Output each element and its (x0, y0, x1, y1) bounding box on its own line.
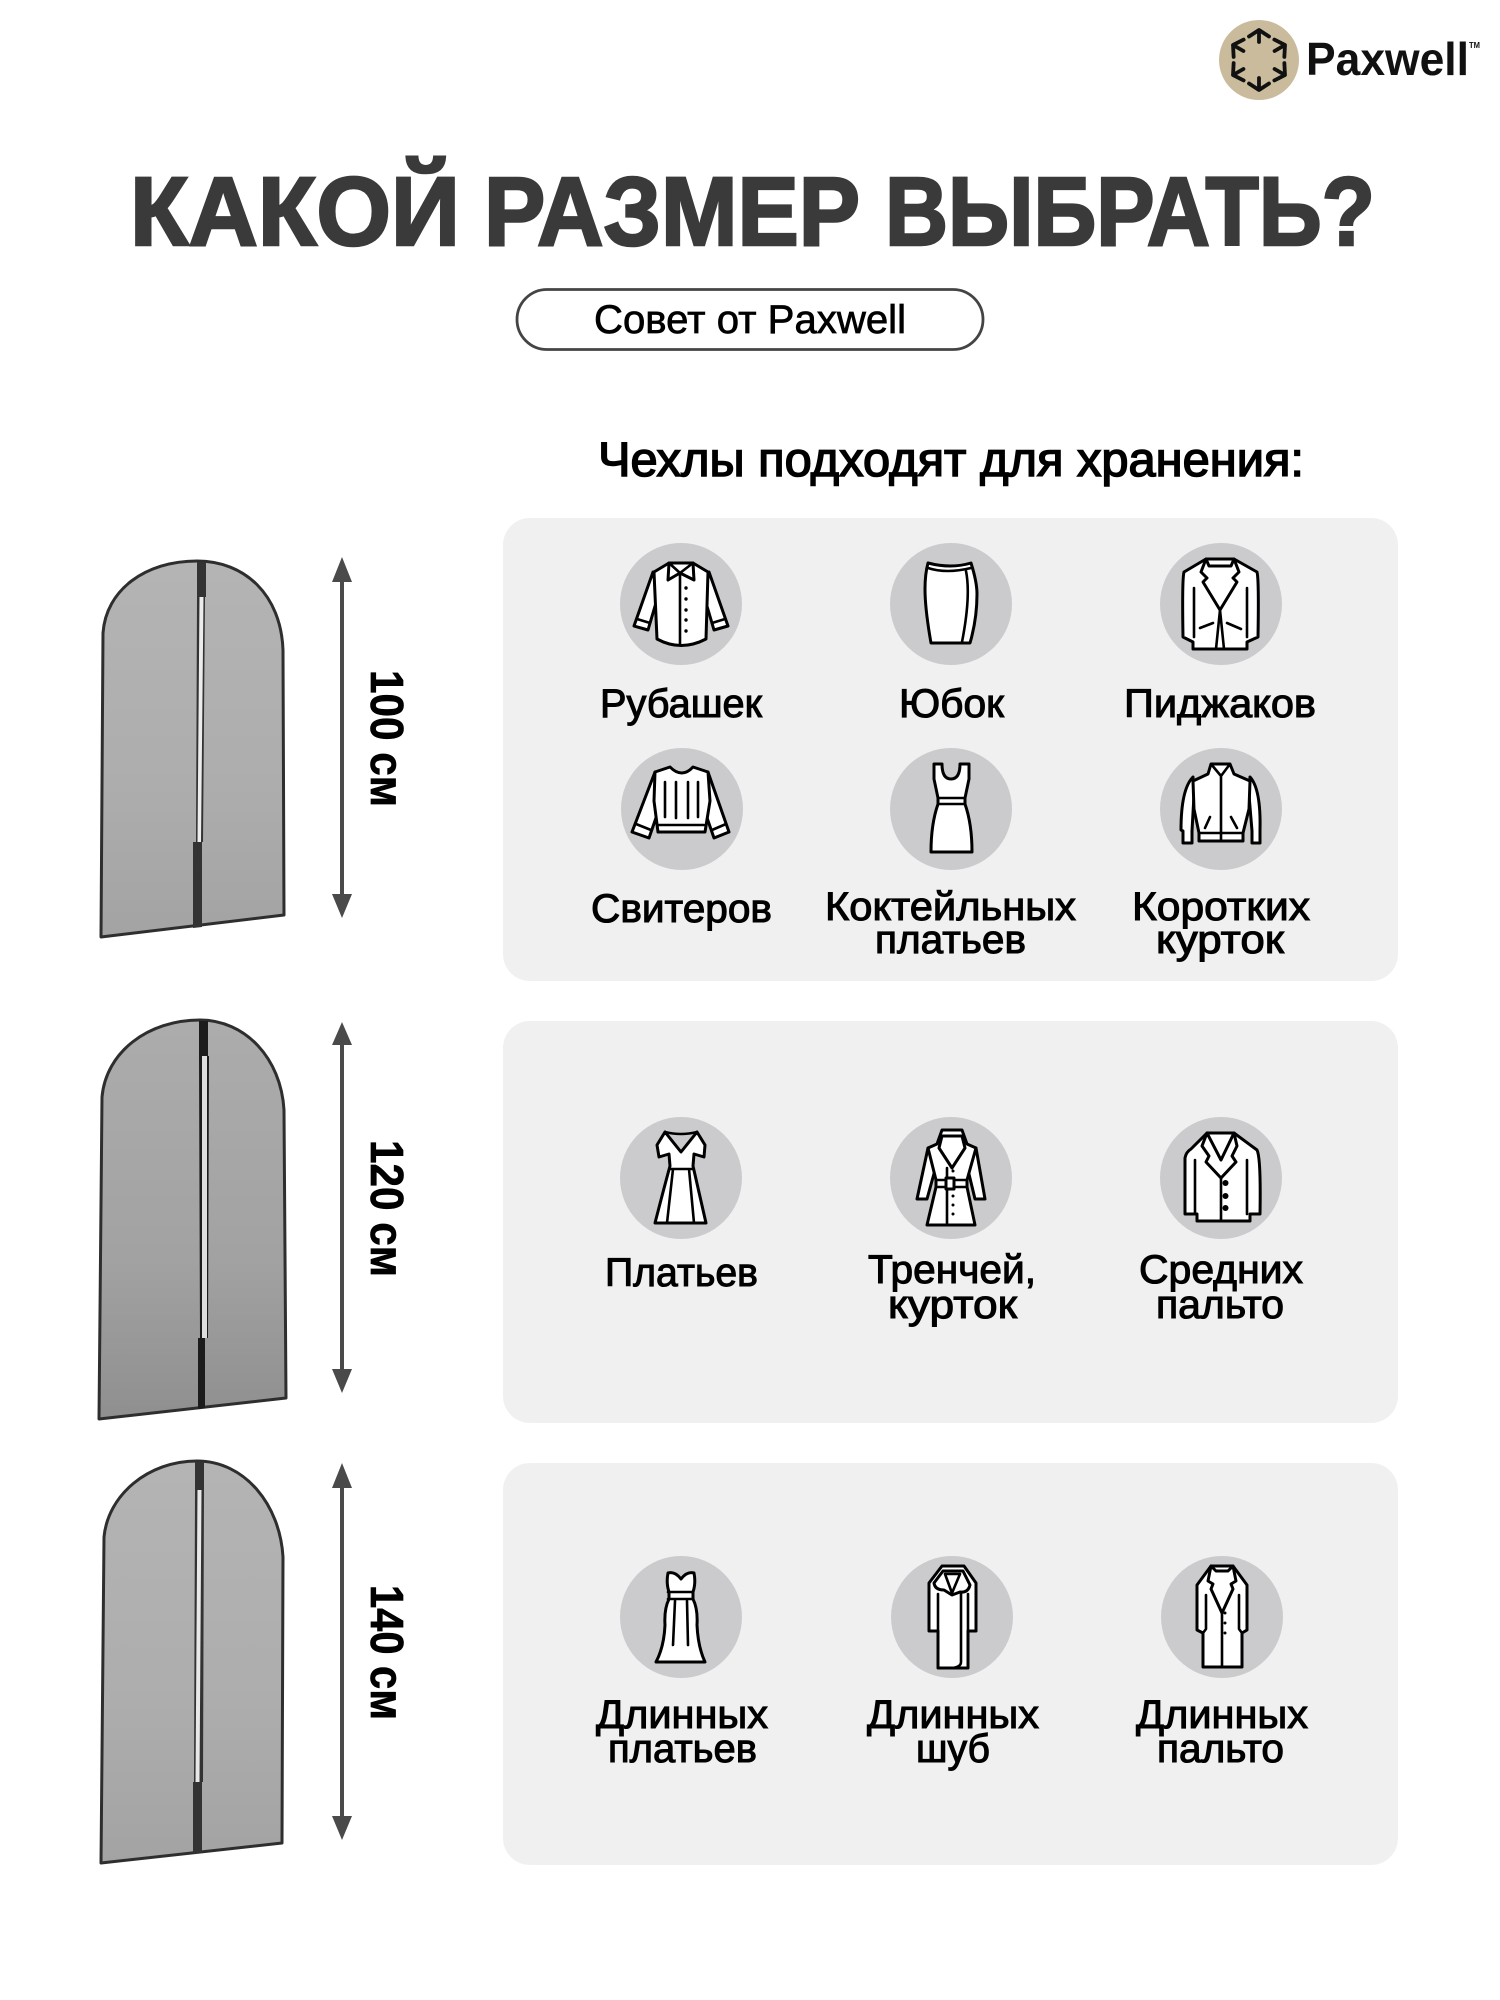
item: long fur coats (867, 1556, 1039, 1771)
item: mid-length coats (1139, 1117, 1303, 1327)
icon: fur coat (891, 1556, 1013, 1678)
label line 2: платьев (875, 918, 1026, 962)
logo mark: six outward arrows in a beige circle (1219, 20, 1299, 100)
label: Длинных (867, 1693, 1039, 1737)
subheading: Чехлы подходят для хранения: (598, 434, 1304, 487)
label line 2: пальто (1156, 1283, 1284, 1327)
label line 2: платьев (608, 1727, 757, 1771)
badge: Совет от Paxwell: Совет от Paxwell (594, 298, 906, 342)
item: cocktail dresses (825, 748, 1076, 962)
icon: dress (620, 1117, 742, 1239)
arrow: 120 cm (332, 1022, 352, 1393)
item: long coats (1136, 1556, 1308, 1771)
icon: blazer (1160, 543, 1282, 665)
icon: skirt (890, 543, 1012, 665)
label: Юбок (899, 682, 1004, 726)
size row: 120 cm garment bag (99, 1020, 286, 1419)
icon: trench coat (890, 1117, 1012, 1239)
label line 2: курток (888, 1283, 1018, 1327)
panel: 140 cm garments (503, 1463, 1398, 1865)
label: Длинных (1136, 1693, 1308, 1737)
label: Коротких (1132, 885, 1310, 929)
item: sweaters (591, 748, 772, 931)
logo: Paxwell (1219, 20, 1480, 100)
arrow: 100 cm (332, 557, 352, 918)
label line 2: шуб (916, 1727, 990, 1771)
item: shirts (600, 543, 762, 726)
badge: Совет от Paxwell (517, 290, 983, 350)
item: long dresses (596, 1556, 768, 1771)
item: blazers (1124, 543, 1316, 726)
icon: long coat (1161, 1556, 1283, 1678)
label: Средних (1139, 1248, 1303, 1292)
title: КАКОЙ (130, 157, 460, 266)
title: РАЗМЕР (484, 157, 860, 266)
label: Платьев (605, 1251, 758, 1295)
logo wordmark: Paxwell (1306, 33, 1469, 85)
dimension label: 120 cm: 120 см (361, 1140, 413, 1277)
label: Рубашек (600, 682, 762, 726)
dimension label: 140 cm: 140 см (361, 1585, 413, 1720)
panel: 100 cm garments (503, 518, 1398, 981)
title (130, 157, 1375, 266)
label: Тренчей, (868, 1248, 1036, 1292)
icon: gown (620, 1556, 742, 1678)
label line 2: пальто (1157, 1727, 1284, 1771)
icon: cocktail dress (890, 748, 1012, 870)
label: Коктейльных (825, 885, 1076, 929)
item: skirts (890, 543, 1012, 726)
dimension label: 100 cm: 100 см (361, 670, 413, 807)
icon: mid coat (1160, 1117, 1282, 1239)
trademark: TM (1469, 41, 1480, 50)
label: Длинных (596, 1693, 768, 1737)
title: ВЫБРАТЬ? (885, 157, 1375, 266)
icon: bomber jacket (1160, 748, 1282, 870)
label line 2: курток (1156, 918, 1285, 962)
size row: 100 cm garment bag (101, 561, 284, 937)
icon: shirt (620, 543, 742, 665)
arrow: 140 cm (332, 1463, 352, 1840)
item: short jackets (1132, 748, 1310, 962)
item: trench coats and jackets (868, 1117, 1036, 1327)
size row: 140 cm garment bag (101, 1461, 283, 1863)
panel: 120 cm garments (503, 1021, 1398, 1423)
label: Пиджаков (1124, 682, 1316, 726)
item: dresses (605, 1117, 758, 1295)
icon: sweater (621, 748, 743, 870)
label: Свитеров (591, 887, 772, 931)
